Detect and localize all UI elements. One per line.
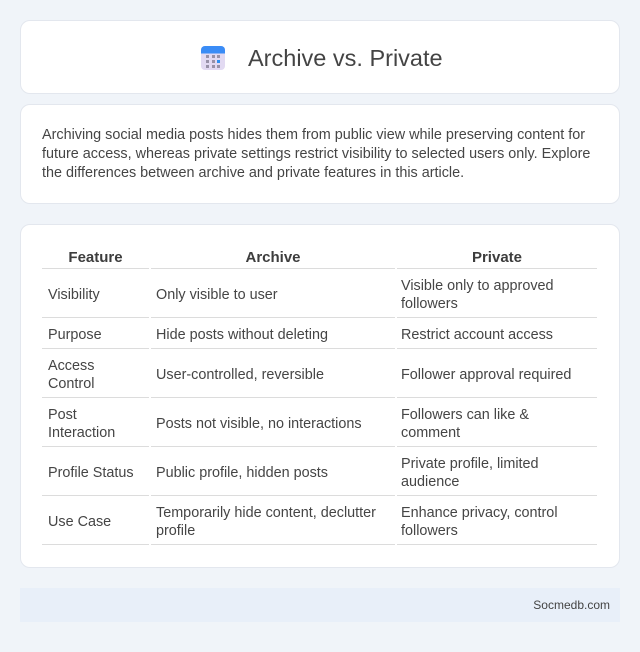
row: Profile Status: Profile Status [48,465,134,481]
panel: title card [20,20,620,94]
intro paragraph [42,127,590,181]
panel: comparison table [20,224,620,568]
title: Archive vs. Private [248,45,443,71]
row: Purpose: Hide posts without deleting [156,327,328,343]
icon: calendar [201,46,225,70]
row: Use Case [48,505,558,539]
footer bar [20,588,620,622]
table header: Private [472,249,522,266]
row: Use Case: Enhance privacy, control [401,505,558,521]
row: Visibility: Only visible to user [156,287,278,303]
row: Post Interaction: comment [401,425,460,441]
row: Use Case: followers [401,523,458,539]
intro paragraph: Archiving social media posts hides them from public view while preserving content for [42,127,585,143]
row: Post Interaction: Followers can like & [401,407,529,423]
row: Access Control: Control [48,376,94,392]
row: Post Interaction [48,407,529,441]
table header: Archive [245,249,301,266]
row: Visibility: Visible only to approved [401,278,554,294]
row: Purpose: Purpose [48,327,102,343]
row: Post Interaction: Interaction [48,425,115,441]
row: Visibility: Visibility [48,287,100,303]
row: Profile Status: audience [401,474,459,490]
row: Post Interaction: Post [48,407,77,423]
row: Use Case: profile [156,523,195,539]
row: Visibility [48,278,554,312]
footer text: Socmedb.com [533,598,610,612]
row: Access Control: User-controlled, reversible [156,367,324,383]
row: Profile Status: Private profile, limited [401,456,539,472]
row: Purpose: Restrict account access [401,327,553,343]
table header [68,249,522,266]
row: Use Case: Use Case [48,514,111,530]
table header: Feature [68,249,123,266]
row: Post Interaction: Posts not visible, no interactions [156,416,362,432]
row: Profile Status: Public profile, hidden posts [156,465,328,481]
panel: intro text [20,104,620,204]
row: Access Control [48,358,571,392]
row: Use Case: Temporarily hide content, declutter [156,505,376,521]
intro paragraph: the differences between archive and private features in this article. [42,165,464,181]
row: Profile Status [48,456,539,490]
row: Purpose [48,327,553,343]
row: Access Control: Follower approval required [401,367,571,383]
row: Access Control: Access [48,358,94,374]
row: Visibility: followers [401,296,458,312]
intro paragraph: future access, whereas private settings restrict visibility to selected users only. Explore [42,146,590,162]
